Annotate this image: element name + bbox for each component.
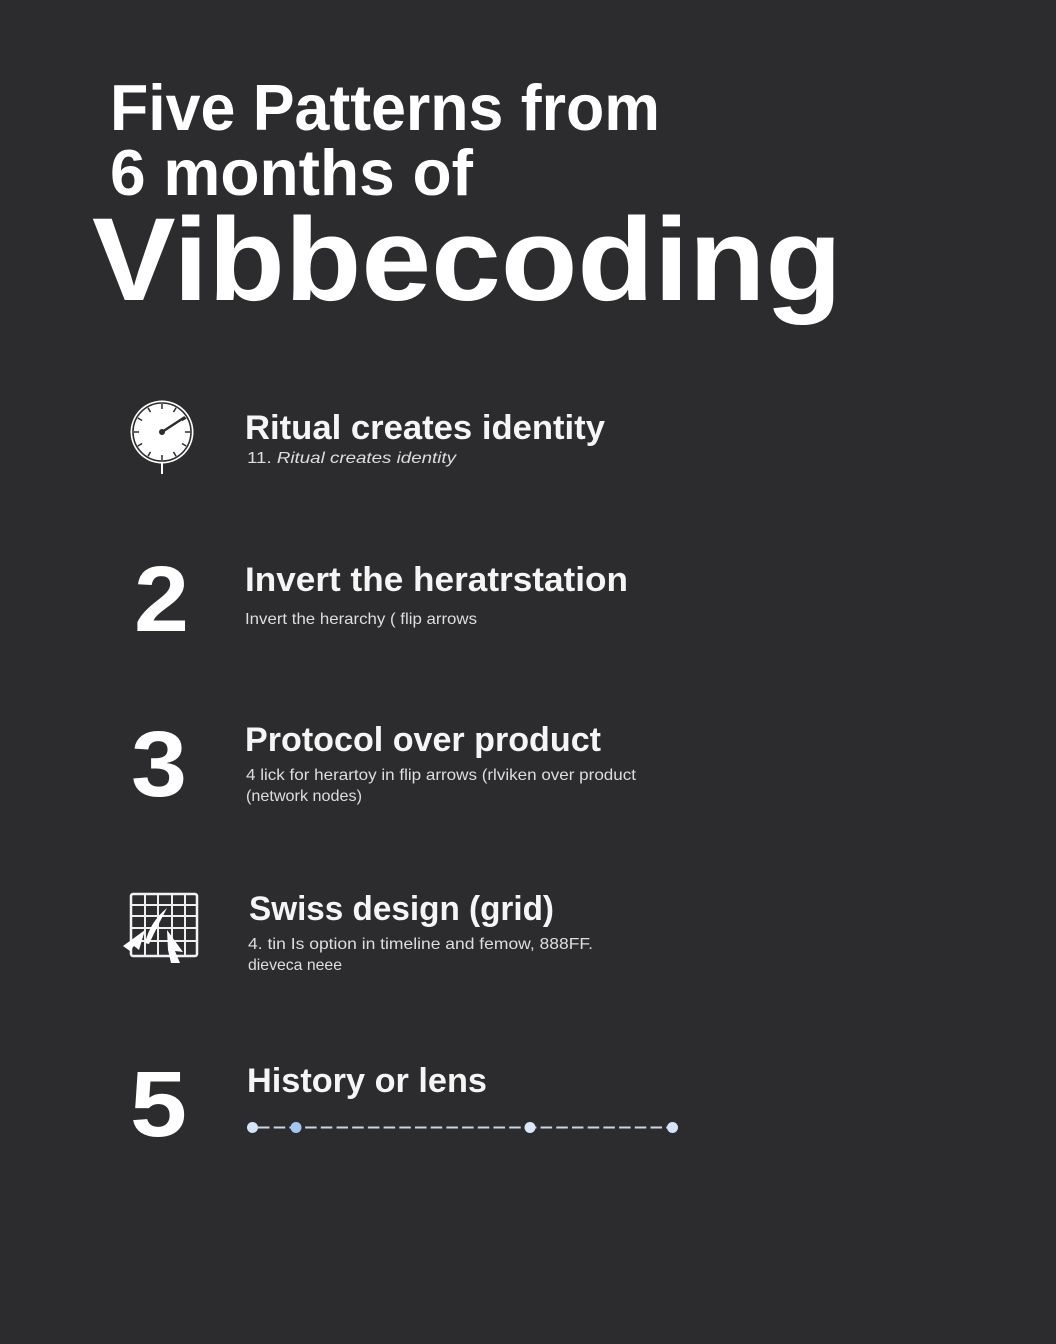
title: Five Patterns from bbox=[110, 71, 660, 144]
description: 4. tin Is option in timeline and femow, 888FF. bbox=[248, 936, 593, 953]
heading: Swiss design (grid) bbox=[249, 890, 554, 928]
description: 4 lick for herartoy in flip arrows (rlviken over product bbox=[246, 767, 637, 784]
description: Invert the herarchy ( flip arrows bbox=[245, 611, 477, 628]
description: 11. Ritual creates identity bbox=[247, 450, 457, 467]
heading: Protocol over product bbox=[245, 721, 601, 759]
item 1: ritual creates identity bbox=[130, 400, 605, 474]
item 5: history or lens bbox=[130, 1052, 678, 1156]
title: 6 months of bbox=[110, 136, 473, 209]
description bbox=[246, 767, 637, 805]
icon: clock bbox=[130, 400, 194, 474]
title: Vibbecoding bbox=[92, 194, 842, 326]
number 2: 2 bbox=[134, 547, 189, 651]
title bbox=[92, 71, 842, 326]
number 3: 3 bbox=[131, 712, 187, 816]
heading: Invert the heratrstation bbox=[245, 561, 628, 599]
number 5: 5 bbox=[130, 1052, 187, 1156]
heading: Ritual creates identity bbox=[245, 409, 605, 447]
item 2: invert the hierarchy bbox=[134, 547, 628, 651]
timeline bbox=[247, 1122, 678, 1133]
heading: History or lens bbox=[247, 1062, 487, 1100]
icon: grid with cursors bbox=[123, 894, 197, 963]
description: (network nodes) bbox=[246, 788, 362, 805]
item 4: swiss design bbox=[123, 890, 593, 974]
description bbox=[248, 936, 593, 974]
description: dieveca neee bbox=[248, 957, 342, 974]
item 3: protocol over product bbox=[131, 712, 637, 816]
